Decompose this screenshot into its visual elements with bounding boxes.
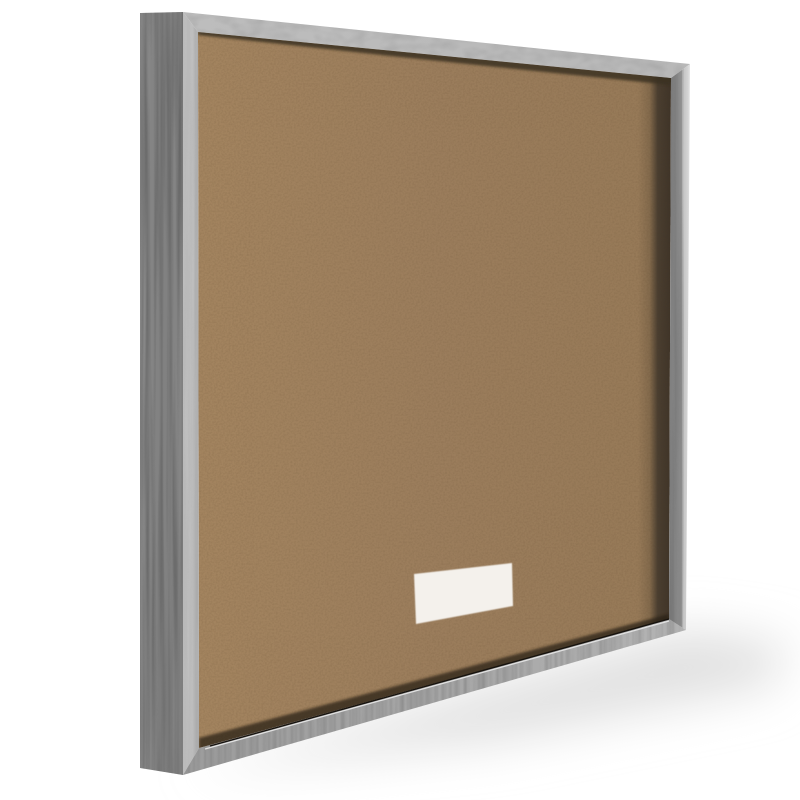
- white label: [414, 563, 513, 624]
- frame side panel: [140, 10, 184, 780]
- frame top rail: [180, 10, 695, 82]
- black gap along the inner bottom edge: [210, 619, 669, 746]
- shade above bottom rail: [199, 614, 669, 750]
- frame right rail: [668, 62, 690, 630]
- shade under top rail: [198, 30, 671, 85]
- cardboard backing: [190, 25, 680, 755]
- white highlight along the inner bottom edge: [205, 621, 669, 749]
- frame bottom rail: [180, 618, 690, 778]
- illustration: framed canvas seen from the back: [140, 12, 787, 775]
- cast shadow on the floor: [190, 630, 790, 772]
- frame left rail: [183, 12, 199, 775]
